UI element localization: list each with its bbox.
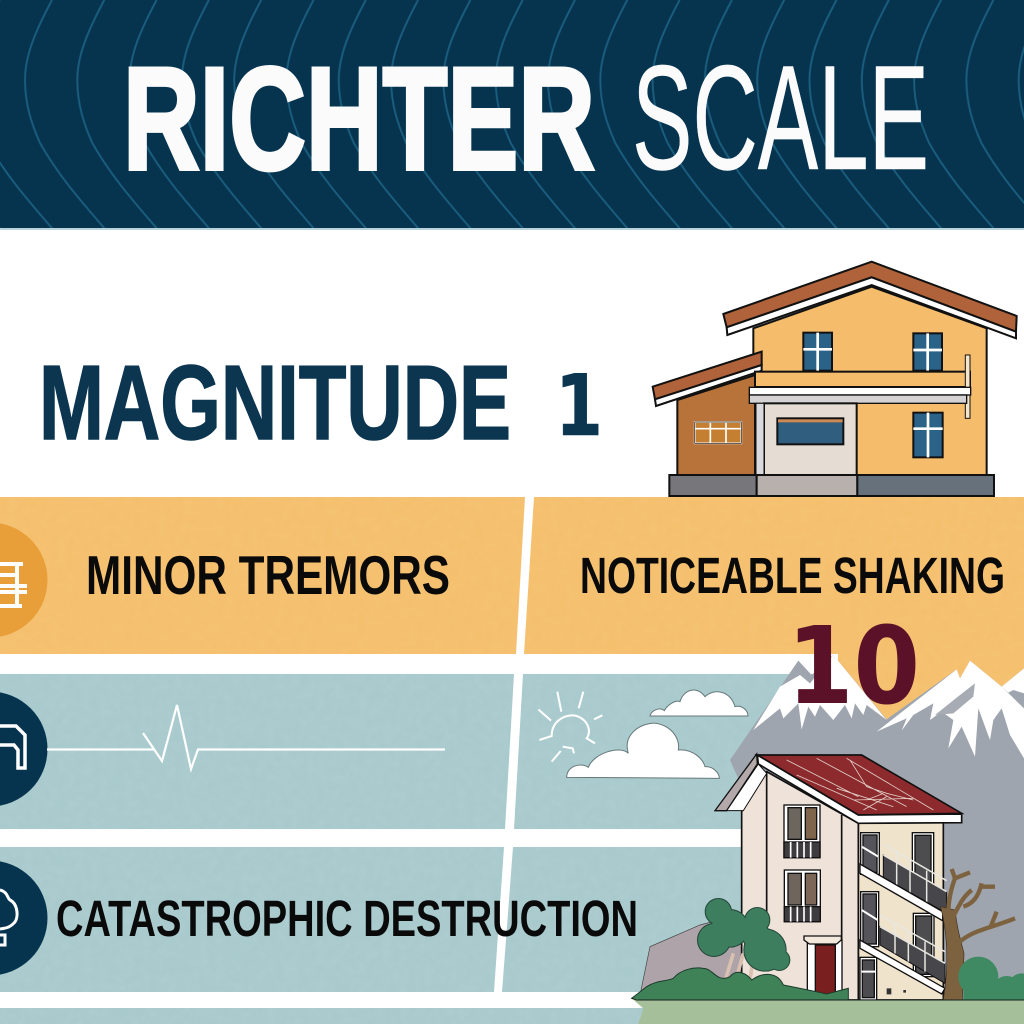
side windows [860,833,934,1000]
door room [764,403,857,475]
seismograph line [47,705,445,769]
ground line [632,998,1024,1000]
header banner [0,0,1024,230]
building front wall [742,772,858,1000]
upper window left [803,333,832,371]
panel: row 2 teal [0,674,840,829]
mountain range [730,655,1024,1002]
heading: magnitude 1: MAGNITUDE [39,344,511,462]
foundation left [669,475,757,496]
back hill [640,913,743,995]
foreground tree crowns [698,899,789,971]
side window [695,422,741,443]
left gable [715,754,757,811]
icon: orange circle with beam [0,522,48,638]
snow caps [753,655,1024,758]
row text: catastrophic destruction: CATASTROPHIC DESTRUCTION [56,890,638,947]
balcony band [755,372,970,387]
balcony slabs [860,864,945,994]
side wall [677,375,755,475]
pillar [756,403,764,475]
upper window right [913,333,942,371]
panel: bottom strip [0,1008,660,1024]
foundation middle [757,475,857,496]
main roof [723,262,1017,332]
side roof [653,352,762,399]
window mullions [862,847,878,972]
grey slab [749,395,967,403]
panel: row 1 orange [0,497,1024,725]
icon: navy circle with tree [0,860,48,976]
side window frame [695,422,741,443]
wall edges [767,772,842,1000]
ground shrub [632,968,848,1000]
main wall [753,287,987,475]
foreground tree crowns outline [698,899,789,971]
heading: magnitude 1: 1 [555,357,603,456]
roof [757,755,962,815]
title: RICHTER [123,37,595,200]
balcony post [965,355,970,418]
icon: house magnitude 1 [653,262,1017,496]
ground band [632,998,1024,1024]
wall details [887,988,906,994]
wide window top strip [778,419,843,422]
panel texture [0,497,1024,1024]
balcony glass [880,855,947,983]
main roof white trim [727,277,1016,338]
balcony rails [880,844,947,972]
side window bars [695,422,741,443]
front windows [784,805,820,922]
side roof white trim [655,365,762,406]
door [804,936,842,997]
icon: sun [538,692,602,762]
row text: minor tremors: MINOR TREMORS [86,544,450,606]
scene: mountains and building [632,655,1024,1024]
roof fascia [757,755,962,823]
panel: row 3 teal [0,847,760,992]
roof streaks [787,758,933,810]
window bars [791,842,811,922]
window crosses [803,333,943,457]
number 10: 10 [787,605,920,729]
lower window [913,413,943,457]
building side wall [858,822,943,1000]
icon: navy circle with house [0,692,48,806]
foreground tree trunks [723,953,753,987]
white slab [749,387,971,395]
bare tree [941,869,1015,1000]
wide window [777,418,843,444]
foundation right [857,475,994,496]
background shrubs [958,957,1024,1004]
clouds [567,690,748,778]
